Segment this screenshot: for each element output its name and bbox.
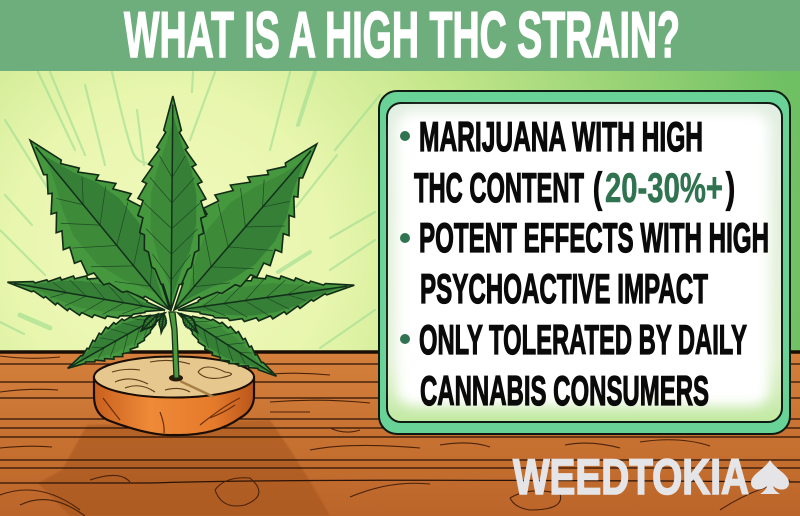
bullet 1: THC CONTENT: [414, 164, 584, 211]
bullet 2: [400, 214, 769, 312]
lower leaflets: [59, 298, 286, 391]
info panel: [379, 91, 790, 434]
bullet 3: [400, 316, 747, 414]
wooden table: [0, 352, 800, 516]
cannabis plant on wood disc: [0, 96, 357, 435]
panel inner: [387, 103, 782, 422]
background wall: [0, 70, 800, 354]
header band: [0, 0, 800, 71]
bullet 1: (: [593, 164, 602, 211]
table shadow: [38, 420, 330, 516]
stem: [169, 312, 179, 378]
bullet 1: [400, 113, 735, 211]
panel frame: [379, 91, 790, 434]
bullet 1: 20-30%+: [605, 164, 723, 211]
bullet 1: ): [726, 164, 735, 211]
wood disc: [94, 356, 254, 435]
middle leaflets: [4, 263, 357, 332]
upper leaflets: [0, 96, 350, 339]
icon: spade: [751, 460, 789, 494]
decorative light rays: [0, 72, 380, 348]
